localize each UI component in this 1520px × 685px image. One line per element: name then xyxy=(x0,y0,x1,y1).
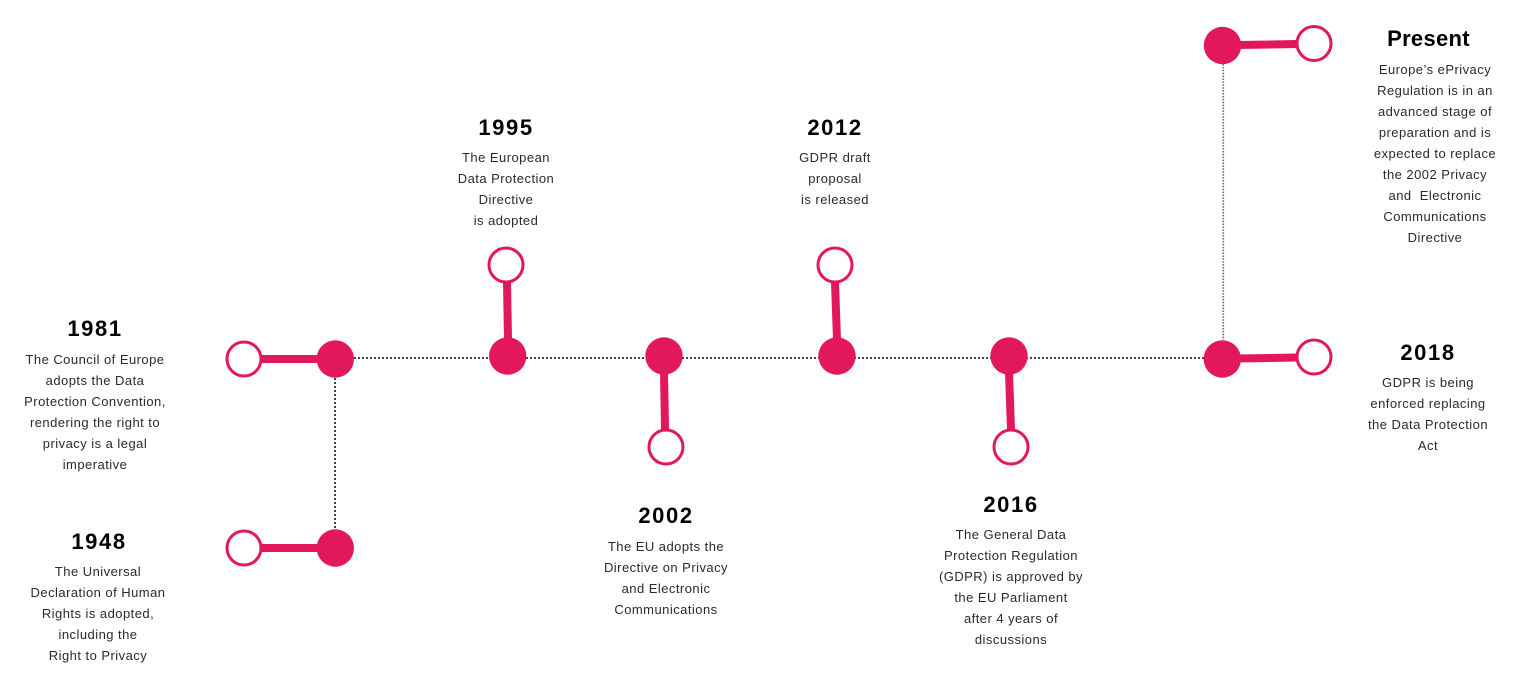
text block: present: and Electronic xyxy=(1389,188,1481,203)
text block: 2002: Directive on Privacy xyxy=(604,560,728,575)
text block: present: Communications xyxy=(1383,209,1487,224)
milestone: 2012 xyxy=(799,115,871,375)
text block: 1948: Rights is adopted, xyxy=(42,606,154,621)
heading: 2018: 2018 xyxy=(1400,340,1456,365)
text block: 1995: is adopted xyxy=(474,213,538,228)
icon: 1948 marker xyxy=(227,529,354,567)
text block: 2016: the EU Parliament xyxy=(954,590,1068,605)
icon: 2002 marker xyxy=(645,337,683,464)
icon: 2018 marker xyxy=(1204,340,1331,378)
text block: 1948: The Universal xyxy=(55,564,141,579)
text block: 1981: rendering the right to xyxy=(30,415,160,430)
icon: 1981 marker xyxy=(227,340,354,378)
icon: present marker xyxy=(1204,26,1331,64)
icon: 2012 marker xyxy=(818,248,856,375)
text block: 2002: Communications xyxy=(614,602,718,617)
text block: 2018: the Data Protection xyxy=(1368,417,1488,432)
text block: 2018: enforced replacing xyxy=(1370,396,1486,411)
text block: 2016: after 4 years of xyxy=(964,611,1058,626)
icon: 1995 marker xyxy=(489,248,526,375)
text block: present: Europe’s ePrivacy xyxy=(1379,62,1491,77)
heading: 1995: 1995 xyxy=(478,115,534,140)
horizontal dotted timeline xyxy=(354,357,1204,359)
text block: 2012: GDPR draft xyxy=(799,150,871,165)
text block: present: the 2002 Privacy xyxy=(1383,167,1487,182)
heading: 1948: 1948 xyxy=(71,529,127,554)
heading: 1981: 1981 xyxy=(67,316,123,341)
text block: 2018: Act xyxy=(1418,438,1438,453)
text block: 2018: GDPR is being xyxy=(1382,375,1474,390)
text block: 1995: The European xyxy=(462,150,550,165)
text block: 1948: Right to Privacy xyxy=(49,648,147,663)
text block: 1981: Protection Convention, xyxy=(24,394,166,409)
text block: 2012: proposal xyxy=(808,171,862,186)
vertical dotted connector: 1948 to 1981 xyxy=(334,378,336,529)
text block: 1995: Data Protection xyxy=(458,171,554,186)
text block: 2016: Protection Regulation xyxy=(944,548,1078,563)
text block: 1948: including the xyxy=(59,627,137,642)
text block: 2016: (GDPR) is approved by xyxy=(939,569,1083,584)
milestone: 1948 xyxy=(31,529,354,663)
text block: 2016: The General Data xyxy=(956,527,1067,542)
milestone: 2018 xyxy=(1204,340,1488,453)
text block: 1995: Directive xyxy=(479,192,533,207)
text block: present: Regulation is in an xyxy=(1377,83,1493,98)
text block: 2016: discussions xyxy=(975,632,1047,647)
vertical dotted connector: 2018 to present xyxy=(1222,64,1224,340)
heading: 2012: 2012 xyxy=(807,115,863,140)
icon: 2016 marker xyxy=(990,337,1028,464)
text block: 2002: and Electronic xyxy=(622,581,710,596)
text block: 1948: Declaration of Human xyxy=(31,585,165,600)
text block: 1981: privacy is a legal xyxy=(43,436,147,451)
milestone: present xyxy=(1204,26,1496,245)
text block: 2002: The EU adopts the xyxy=(608,539,724,554)
text block: 1981: adopts the Data xyxy=(46,373,145,388)
heading: Present: Present xyxy=(1387,26,1470,51)
text block: 1981: The Council of Europe xyxy=(25,352,165,367)
text block: present: expected to replace xyxy=(1374,146,1496,161)
milestone: 2002 xyxy=(604,337,728,617)
text block: 1981: imperative xyxy=(63,457,127,472)
milestone: 2016 xyxy=(939,337,1083,647)
heading: 2016: 2016 xyxy=(983,492,1039,517)
heading: 2002: 2002 xyxy=(638,503,694,528)
milestone: 1995 xyxy=(458,115,554,375)
text block: present: advanced stage of xyxy=(1378,104,1492,119)
text block: present: Directive xyxy=(1408,230,1462,245)
milestone: 1981 xyxy=(24,316,354,472)
text block: 2012: is released xyxy=(801,192,869,207)
text block: present: preparation and is xyxy=(1379,125,1491,140)
